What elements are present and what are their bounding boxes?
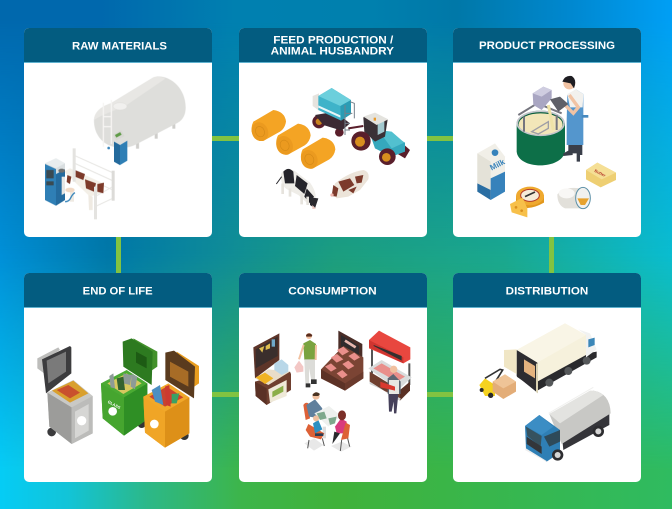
illustration: cheese vat, worker and dairy products [477, 76, 616, 217]
icon: black and white cow [276, 169, 318, 209]
panel: distribution [453, 273, 641, 482]
header: consumption: CONSUMPTION [288, 285, 377, 297]
connector: consumption to end of life [212, 392, 239, 397]
icon: family at table [303, 392, 352, 452]
icon: butter block: Butter [594, 168, 607, 178]
illustration: recycling bins [37, 338, 199, 448]
connector: feed production to product processing [427, 136, 453, 141]
icon: forklift with pallets [479, 369, 516, 399]
icon: milk tanker truck [525, 387, 611, 462]
icon: green glass bin: GLASS [107, 399, 122, 410]
panel: end of life [24, 273, 212, 482]
icon: butcher stall with seller [368, 331, 412, 413]
header: raw materials: RAW MATERIALS [72, 40, 167, 52]
panel: consumption [239, 273, 427, 482]
icon: orange plastic bin [143, 351, 199, 448]
panel: product processing [453, 28, 641, 237]
connector: distribution to consumption [427, 392, 453, 397]
connector: raw materials to feed production [212, 136, 239, 141]
icon: milk storage tank [94, 76, 186, 165]
icon: soft cheese tin [557, 187, 590, 209]
illustration: milk tank and milking robot [45, 76, 186, 219]
icon: cheese and milk stall [253, 333, 291, 405]
icon: tractor [351, 113, 410, 165]
header: distribution: DISTRIBUTION [506, 285, 589, 297]
header: distribution [453, 273, 641, 308]
header: feed production / animal husbandry: FEED PRODUCTION / [273, 34, 393, 46]
icon: cheese vat [517, 87, 565, 165]
header: product processing [453, 28, 641, 63]
header: consumption [239, 273, 427, 308]
icon: hay bales [249, 110, 335, 171]
icon: grey organic bin [37, 346, 93, 444]
illustration: delivery truck, forklift and milk tanker [479, 323, 611, 462]
panel: raw materials [24, 28, 212, 237]
icon: delivery truck with open doors [504, 323, 597, 393]
header: feed production / animal husbandry [239, 28, 427, 63]
header: feed production / animal husbandry: ANIMAL HUSBANDRY [271, 45, 395, 57]
icon: brown and white cow [330, 170, 369, 198]
icon: milking robot and cow in stall [45, 148, 115, 219]
header: raw materials [24, 28, 212, 63]
icon: shopper with bag [294, 333, 317, 387]
icon: baler trailer [312, 88, 363, 137]
connector: end of life to raw materials [116, 237, 121, 273]
panel: feed production / animal husbandry [239, 28, 427, 237]
icon: milk carton [477, 143, 507, 200]
illustration: market stalls, shopper and family at table [253, 331, 412, 452]
icon: butter block [586, 163, 616, 187]
header: product processing: PRODUCT PROCESSING [479, 40, 615, 52]
icon: milk carton: Milk [488, 157, 507, 172]
header: end of life [24, 273, 212, 308]
header: end of life: END OF LIFE [83, 285, 153, 297]
icon: worker pouring milk [550, 76, 588, 162]
icon: round cheese and wedge [510, 187, 544, 217]
connector: product processing to distribution [549, 237, 554, 273]
icon: green glass bin [101, 338, 157, 436]
illustration: hay bales, tractor and cows [249, 88, 410, 209]
icon: meat display counter [321, 331, 363, 391]
